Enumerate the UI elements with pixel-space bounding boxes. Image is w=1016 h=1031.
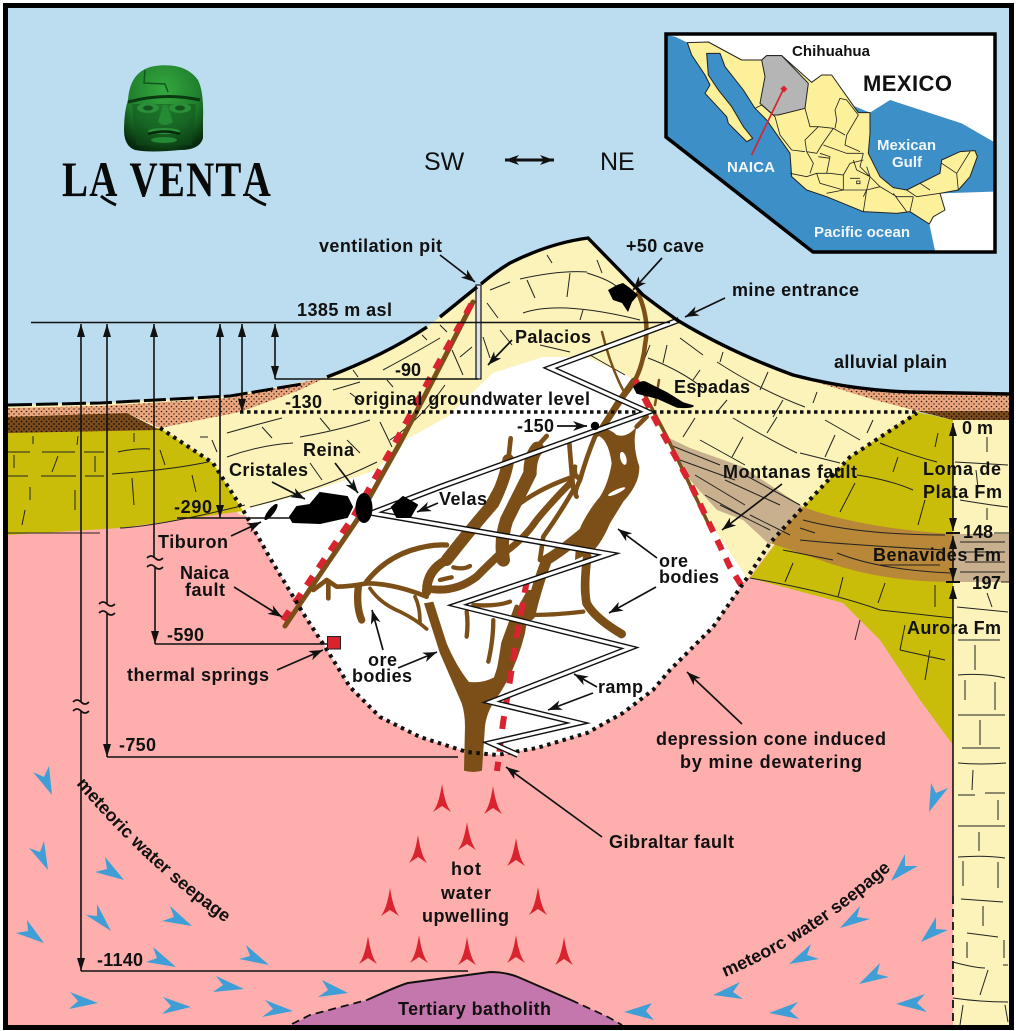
label: ramp: ramp — [598, 677, 643, 697]
map frame — [666, 34, 995, 252]
meteoric seepage blue arrows, right — [624, 783, 948, 1020]
logo: olmec head — [124, 65, 203, 152]
heading: SW orientation: SW — [424, 148, 465, 176]
Naica fault — [283, 302, 473, 626]
layer: pink basement rock — [8, 420, 1009, 1025]
heading: NE orientation: NE — [600, 148, 635, 176]
label: ore bodies left: bodies — [352, 666, 412, 686]
label: mine entrance: mine entrance — [732, 280, 859, 300]
original groundwater level dotted line — [240, 410, 917, 414]
layer: yellow limestone mountain — [8, 238, 1009, 580]
label: -590: -590 — [167, 625, 204, 645]
label: -290: -290 — [174, 497, 212, 517]
limestone fracture marks — [8, 255, 1008, 1025]
label: Montanas fault: Montanas fault — [723, 462, 857, 482]
cave: Reina — [356, 493, 372, 523]
cave: Velas — [392, 497, 417, 517]
label: Loma de Plata Fm: Plata Fm — [923, 482, 1002, 502]
label: Loma de Plata Fm — [923, 459, 1002, 502]
cave: -150 — [591, 422, 599, 430]
ramp: zigzag mine tunnel — [372, 320, 679, 755]
label: Naica fault: fault — [185, 580, 225, 600]
layer: brown Benavides band — [770, 507, 953, 582]
cave: +50 cave — [608, 283, 638, 312]
label: hot water upwelling: upwelling — [422, 906, 509, 926]
label: +50 cave: +50 cave — [626, 236, 704, 256]
label: Velas: Velas — [439, 489, 487, 509]
label: Gibraltar fault: Gibraltar fault — [609, 832, 734, 852]
label: Aurora Fm: Aurora Fm — [907, 618, 1001, 638]
label: Tertiary batholith: Tertiary batholith — [398, 999, 551, 1019]
label: -90: -90 — [395, 360, 421, 380]
label: 1385 m asl: 1385 m asl — [297, 300, 392, 320]
map Mexico land — [687, 42, 977, 224]
label: original groundwater level: original groundwater level — [354, 389, 590, 409]
Gibraltar fault — [497, 580, 527, 771]
curved label: meteorc water seepage: meteorc water seepage — [722, 864, 890, 977]
label: Benavides Fm: Benavides Fm — [873, 545, 1001, 565]
label: 148: 148 — [963, 522, 993, 542]
label: depression cone note: depression cone induced — [656, 729, 886, 749]
depth reference lines — [31, 322, 1009, 1025]
label: depression cone note: by mine dewatering — [680, 752, 862, 772]
label: Reina: Reina — [303, 440, 355, 460]
map frame border — [666, 34, 995, 252]
layer: stratigraphic column strip — [953, 412, 1009, 1025]
label: hot water upwelling — [422, 859, 509, 926]
label: Cristales: Cristales — [229, 460, 308, 480]
ore bodies: branching brown veins — [313, 293, 659, 772]
label: hot water upwelling: water — [440, 883, 491, 903]
map label: Mexican Gulf: Gulf — [892, 154, 923, 171]
label: ore bodies right — [659, 551, 719, 587]
label: 197: 197 — [972, 573, 1001, 593]
label: alluvial plain: alluvial plain — [834, 352, 947, 372]
map NAICA red pointer — [752, 89, 783, 155]
map label: Pacific ocean: Pacific ocean — [814, 224, 910, 241]
arrow: SW-NE direction — [505, 158, 554, 162]
layer: alluvium right — [793, 375, 1009, 411]
inset map: Mexico — [666, 34, 995, 252]
label: ore bodies right: bodies — [659, 567, 719, 587]
map label: MEXICO: MEXICO — [863, 71, 952, 96]
label: Naica fault: Naica — [180, 563, 230, 583]
map state boundaries — [755, 98, 970, 212]
map oceans — [666, 35, 993, 251]
layer: olive formation right — [750, 412, 953, 745]
label: ore bodies left: ore — [368, 650, 397, 670]
meteoric seepage blue arrows, left — [16, 766, 348, 1017]
label: Espadas: Espadas — [674, 377, 750, 397]
cave: Espadas — [634, 382, 693, 407]
ground surface line — [327, 238, 1009, 394]
label: Tiburon: Tiburon — [158, 532, 228, 552]
cave: Tiburon — [262, 502, 280, 522]
hot water upwelling red arrows — [359, 784, 573, 965]
label: Loma de Plata Fm: Loma de — [923, 459, 1001, 479]
ventilation pit shaft — [476, 285, 481, 379]
curved label: meteoric water seepage: meteoric water seepage — [76, 778, 229, 921]
layer: tan Benavides band in column — [953, 534, 1009, 582]
Montanas / Espadas fault — [635, 380, 743, 588]
label: ventilation pit: ventilation pit — [319, 236, 442, 256]
map Chihuahua state — [760, 56, 808, 115]
label: ore bodies left — [352, 650, 412, 686]
label: -750: -750 — [119, 735, 156, 755]
layer: alluvium left — [8, 377, 327, 428]
thermal springs marker — [328, 636, 340, 649]
layer: olive formation left — [8, 428, 243, 535]
alluvial plain dashed surface — [8, 384, 302, 405]
panel: geological cross-section — [8, 238, 1009, 1025]
label: ore bodies right: ore — [659, 551, 688, 571]
map label: Chihuahua: Chihuahua — [792, 43, 871, 60]
label: 0 m: 0 m — [962, 418, 993, 438]
depression cone: white dewatered zone — [243, 357, 747, 755]
layer: dark alluvium right — [917, 411, 1009, 420]
layer: dark alluvium left — [8, 413, 160, 433]
cave: Cristales — [290, 493, 352, 523]
label: hot water upwelling: hot — [451, 859, 481, 879]
map label: Mexican Gulf — [877, 137, 936, 171]
title: LA VENTA: LA VENTA — [62, 151, 272, 207]
label: depression cone note — [656, 729, 886, 772]
batholith: Tertiary intrusion — [292, 972, 622, 1025]
label: thermal springs: thermal springs — [127, 665, 269, 685]
map label: Mexican Gulf: Mexican — [877, 137, 936, 154]
label: -1140: -1140 — [97, 950, 143, 970]
label: Naica fault — [180, 563, 230, 600]
pointer arrows for labels — [231, 255, 782, 837]
depression cone dotted outline — [160, 413, 917, 755]
label: -130: -130 — [285, 392, 322, 412]
label: Palacios: Palacios — [515, 327, 591, 347]
map label: NAICA: NAICA — [727, 159, 775, 176]
label: -150: -150 — [517, 416, 554, 436]
layer: tan Benavides band in cone — [667, 437, 803, 545]
